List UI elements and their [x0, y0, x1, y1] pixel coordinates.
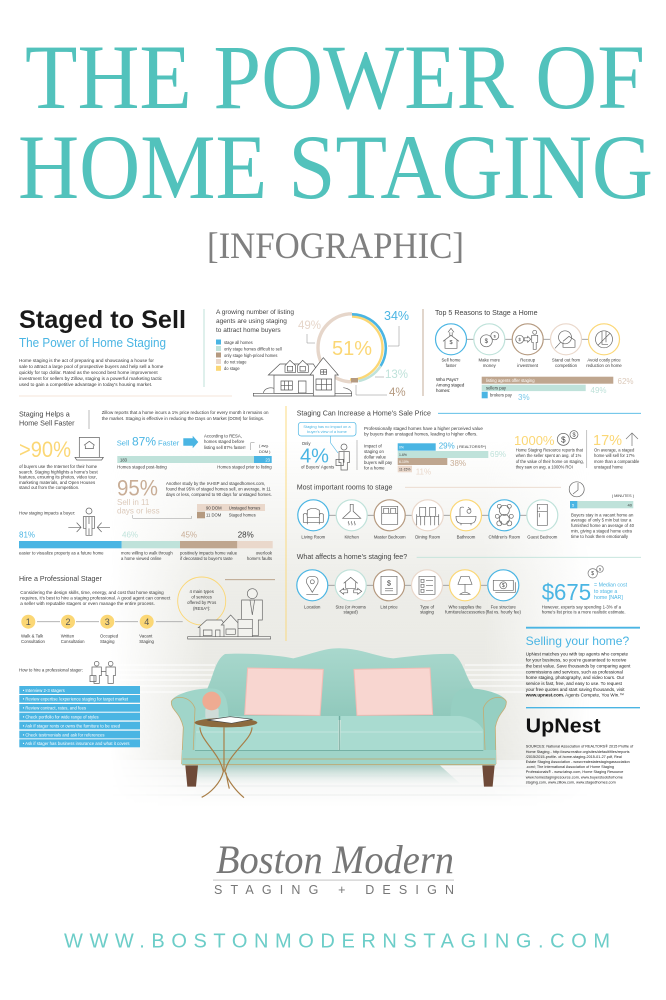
sources: www.homestagingresource.com, www.buyerstoolsforhome	[526, 775, 623, 779]
heading: staged to sell: Staged to Sell	[19, 306, 186, 334]
panel: time in home	[569, 482, 635, 539]
stat: 4 percent of agents	[300, 441, 334, 470]
stat: 1000 percent roi: $	[572, 432, 576, 438]
bar chart: dollar impact: 29%	[439, 442, 455, 451]
title	[18, 26, 653, 218]
reason 2: make more money: money	[483, 363, 497, 368]
panel: staging helps a home sell faster: ( avg.	[259, 443, 269, 448]
icon: house	[253, 358, 352, 396]
stat: 1000 percent roi: when the seller spent an avg. of 1%	[516, 453, 582, 458]
steps 1 to 4: 2	[65, 617, 71, 627]
factor: list price: $	[387, 580, 391, 588]
resa note: listing sell 87% faster!	[204, 445, 246, 450]
checklist for hiring: • Ask if stager has business insurance and what it covers	[23, 741, 130, 746]
who pays bars: brokers pay	[490, 392, 513, 398]
median cost label: = Median cost	[594, 582, 628, 588]
factor: location: Location	[304, 604, 321, 609]
buyer impact bar: more willing to walk through	[121, 550, 173, 555]
heading: selling your home: Selling your home?	[526, 634, 630, 648]
bar chart: dollar impact: 11%	[416, 468, 431, 477]
bar: days on market: Homes staged prior to listing	[217, 465, 272, 470]
icon: coins	[588, 566, 603, 578]
buyers paragraph: search. Staging highlights a home's best	[19, 469, 98, 474]
steps 1 to 4: 1	[26, 617, 31, 627]
stat: 1000 percent roi: $	[561, 436, 566, 444]
room: master bedroom	[374, 500, 406, 539]
zillow statement: the market. Staging is effective in reducing the Days on Market (DOM) for listings.	[102, 416, 264, 421]
who pays bars: Who Pays?	[436, 377, 459, 382]
stat: 4 percent of agents: Only	[302, 441, 311, 446]
sources: staging.com, www.zillow.com, www.stagedhomes.com	[526, 780, 616, 784]
service types callout: of services	[191, 594, 212, 600]
heading: agents are using staging	[216, 318, 287, 325]
bar: minutes	[570, 501, 633, 508]
who pays bars: Among staged	[436, 382, 465, 388]
buyer impact bar: positively impacts home value	[180, 550, 238, 555]
legend: only stage homes difficult to sell	[224, 346, 282, 351]
buyer impact bar: overlook	[256, 550, 273, 555]
buyer impact bar: 45%	[181, 531, 197, 540]
donut chart	[318, 314, 386, 382]
who pays bars	[436, 377, 634, 402]
factor: who supplies: furniture/accessories	[445, 610, 485, 615]
steps 1 to 4: Walk & Talk	[21, 633, 44, 638]
steps 1 to 4: 3	[105, 617, 110, 627]
room: children's room	[488, 500, 521, 539]
reason 2: make more money	[474, 324, 505, 368]
service types callout: offered by Pros	[187, 600, 216, 605]
subheading: The Power of Home Staging	[19, 336, 166, 350]
impact label: for a home	[364, 466, 385, 471]
reason 4: stand out: Stand out from	[552, 358, 581, 362]
reason 2: make more money: Make more	[479, 358, 501, 362]
promo paragraph: www.upnest.com.	[525, 693, 564, 698]
buyer impact bar: 46%	[122, 531, 138, 540]
sources: .com/; The International Association of Home Staging	[526, 765, 614, 769]
reason 4: stand out: competition	[555, 363, 578, 368]
bar: days on market	[117, 456, 272, 470]
buyers paragraph: stand out from the competition.	[19, 485, 79, 490]
room: bathroom: Bathroom	[457, 534, 476, 539]
heading: Most important rooms to stage	[297, 483, 393, 491]
factor: fee structure	[486, 570, 522, 615]
median cost label: to stage a	[594, 589, 617, 595]
panel: most important rooms	[297, 483, 561, 539]
arm piping	[171, 697, 506, 764]
steps 1 to 4	[21, 615, 154, 644]
checklist for hiring: • Ask if stager rents or owns the furniture to be used	[23, 723, 121, 728]
panel: top 5 reasons	[435, 309, 634, 402]
intro paragraph: sale to attract a large pool of prospective buyers and help sell a home	[19, 364, 164, 369]
stat: 675 dollars: $675	[542, 579, 591, 605]
paragraph: furnished home an average of 40	[571, 523, 635, 528]
heading: Home Sell Faster	[19, 418, 75, 428]
promo paragraph: for your business, so you're guaranteed to receive	[526, 658, 627, 662]
callout: no impact: Staging has no impact on a	[303, 424, 351, 429]
reason 1: sell home faster	[436, 324, 466, 368]
pillows	[245, 668, 323, 715]
legend	[216, 340, 282, 371]
steps 1 to 4: Written	[61, 633, 75, 638]
factor: type of staging: Type of	[420, 604, 435, 609]
perceived value text: by buyers than unstaged homes, leading to higher offers.	[364, 432, 478, 437]
reason 5: avoid price reduction: Avoid costly price	[587, 358, 621, 362]
how to hire label: How to hire a professional stager:	[19, 668, 83, 673]
bar: days on market: 23	[265, 457, 271, 462]
room: guest bedroom	[527, 500, 558, 539]
factor: fee structure: (flat vs. hourly fee)	[486, 610, 522, 615]
service types callout: 4 main types	[190, 589, 214, 594]
reason 2: make more money: $	[485, 339, 489, 345]
legend: do not stage	[224, 360, 247, 365]
estimate note: home's list price is a more realistic estimate.	[542, 610, 626, 615]
logo: upnest: UpNest	[526, 715, 601, 738]
heading: Top 5 Reasons to Stage a Home	[435, 309, 538, 317]
reason 5: avoid price reduction: reduction on home	[586, 363, 622, 368]
steps 1 to 4: Occupied	[100, 633, 119, 638]
buyer impact bar: a home viewed online	[121, 556, 162, 561]
service types callout: (RESA*):	[193, 606, 210, 611]
stat: 1000 percent roi: 1000%	[514, 433, 555, 448]
stat: 17 percent more: home will sell for 17%	[594, 453, 635, 458]
dom comparison table: 11 DOM	[206, 512, 222, 518]
buyer impact bar: 81%	[19, 531, 35, 540]
promo paragraph: service is fast, free, and easy to use. To request	[526, 681, 623, 686]
bar chart: dollar impact: 69%	[490, 450, 506, 459]
sofa legs	[185, 765, 495, 787]
logo: boston modern staging and design: Boston Modern	[216, 837, 454, 882]
stat: 4 percent of agents: 4%	[300, 446, 329, 468]
callout: no impact: buyer's view of a home	[307, 429, 347, 434]
sources: Professionals® - www.iahsp.com, Home Staging Resource	[526, 770, 623, 774]
factor: size: staged)	[344, 610, 358, 615]
service types callout	[178, 577, 226, 625]
buyer impact bar	[19, 531, 273, 561]
legend: only stage high-priced homes	[224, 353, 277, 358]
stat: sell 87 percent faster: Faster	[158, 439, 180, 448]
callout values: 34%	[384, 309, 409, 323]
panel: staging can increase sale price	[297, 410, 641, 477]
dom comparison table	[197, 504, 265, 518]
buyers paragraph: marketing materials, and Open Houses	[19, 480, 96, 485]
bar chart: dollar impact: 1-6%	[399, 453, 407, 457]
buyer impact bar: 28%	[238, 531, 254, 540]
stat: 17 percent more: unstaged home	[594, 464, 624, 469]
panel: staged to sell intro	[19, 306, 186, 387]
callout values: 13%	[385, 369, 408, 381]
paragraph: average of only 5 min but tour a	[571, 518, 632, 523]
iahsp study text: days or less, compared to 90 days for unstaged homes.	[166, 492, 272, 497]
bar chart: dollar impact: 6-10%	[399, 460, 409, 464]
reason 1: sell home faster: faster	[446, 363, 457, 368]
stat: 1000 percent roi	[514, 431, 584, 469]
reason 3: recoup investment	[512, 324, 543, 368]
room: kitchen	[336, 500, 367, 539]
who pays bars: 49%	[590, 386, 607, 395]
bar chart: dollar impact	[398, 442, 506, 477]
callout: no impact	[298, 422, 356, 453]
stat: 4 percent of agents: of Buyers' Agents	[301, 465, 334, 470]
dom comparison table: Unstaged homes	[229, 505, 260, 510]
promo paragraph: the best value. Save thousands by comparing agent	[526, 663, 631, 668]
bar: days on market: 183	[120, 457, 128, 462]
room: living room	[298, 500, 329, 539]
bar: minutes: 40	[628, 502, 633, 507]
steps 1 to 4: Consultation	[21, 639, 45, 644]
panel: time in home: ( MINUTES )	[612, 493, 635, 498]
how staging impacts label: How staging impacts a buyer:	[19, 510, 75, 515]
subtitle: infographic: [INFOGRAPHIC]	[207, 226, 464, 267]
checklist for hiring	[19, 686, 140, 747]
right arm	[451, 688, 507, 765]
room: guest bedroom: Guest Bedroom	[527, 534, 558, 539]
heading: Hire a Professional Stager	[19, 575, 102, 583]
factor: list price: List price	[380, 604, 398, 609]
panel: staging fee factors	[297, 553, 641, 615]
paragraph: min, giving a staged home extra	[571, 528, 633, 533]
sofa back	[207, 648, 475, 720]
floor shadow	[193, 765, 460, 783]
resa note: homes staged before	[204, 439, 245, 444]
panel: median cost 675: $	[591, 571, 594, 577]
who pays bars: listing agents offer staging	[486, 378, 535, 383]
who pays bars: 3%	[518, 393, 530, 402]
reason 2: make more money: $	[494, 333, 497, 338]
website url: WWW.BOSTONMODERNSTAGING.COM	[64, 931, 610, 953]
stat: 1000 percent roi: Home Staging Resource reports that	[516, 448, 584, 453]
bar chart: dollar impact: 11-15%	[399, 468, 410, 472]
reason 1: sell home faster: Sell home	[441, 358, 461, 362]
median cost label: home [NAR]	[594, 595, 623, 601]
flower vase	[205, 708, 219, 718]
estimate note: However, experts say spending 1-3% of a	[542, 604, 622, 609]
room photo backdrop: wall, wainscot, floor	[135, 491, 562, 796]
heading: Staging Helps a	[19, 410, 70, 419]
panel: median cost 675: $	[599, 568, 601, 572]
room: dining room: Dining Room	[415, 534, 441, 539]
checklist for hiring: • Check portfolio for wide range of styles	[23, 714, 99, 719]
legend: do stage	[224, 366, 240, 371]
stat: 95 percent: Sell in 11	[117, 498, 150, 507]
stat: 17 percent more	[593, 433, 640, 469]
callout values	[298, 309, 409, 399]
room: kitchen: Kitchen	[345, 534, 359, 539]
room: children's room: Children's Room	[488, 534, 521, 539]
factor: size	[335, 570, 366, 615]
paragraph: Buyers stay in a vacant home an	[571, 512, 634, 517]
buyer impact bar: easier to visualize property as a future home	[19, 550, 104, 555]
resa note: According to RESA,	[204, 434, 242, 438]
impact label: Impact of	[364, 444, 382, 449]
steps 1 to 4: 4	[144, 617, 149, 627]
room: bathroom	[450, 500, 482, 539]
factor: who supplies	[445, 570, 485, 615]
impact label: dollar value	[364, 455, 387, 460]
impact label: buyers will pay	[364, 460, 393, 465]
paragraph: requires, it's best to hire a staging professional. A good agent can connect	[20, 596, 171, 600]
stat: 95 percent	[117, 476, 160, 516]
buyers paragraph: of buyers use the Internet for their home	[19, 464, 98, 469]
paragraph: time to hook them emotionally	[571, 534, 629, 539]
bar chart: dollar impact: 38%	[450, 459, 466, 468]
reason 4: stand out	[550, 324, 582, 368]
buyers paragraph: features, ensuring its photos, video tour,	[19, 474, 97, 480]
intro paragraph: used to gain a competitive advantage in today's housing market.	[19, 382, 152, 387]
sources: Home Staging - http://www.realtor.org/sites/default/files/reports	[526, 750, 630, 754]
stat: 17 percent more: 17%	[593, 433, 622, 449]
icon: laptop	[75, 437, 103, 460]
heading: What affects a home's staging fee?	[297, 553, 407, 561]
panel: staging helps a home sell faster	[19, 410, 273, 561]
factor: type of staging	[412, 570, 442, 615]
icon: agent with briefcase	[336, 444, 349, 470]
panel: median cost 675	[542, 566, 628, 615]
icon: buyer with arrows	[68, 508, 110, 535]
promo paragraph: UpNest matches you with top agents who compete	[526, 652, 629, 657]
reason 3: recoup investment: Recoup	[520, 358, 536, 362]
callout values: 49%	[298, 320, 321, 332]
intro paragraph: investment for sellers by Zillow, staging is a powerful marketing tactic	[19, 376, 163, 381]
panel: upnest promotion	[525, 628, 640, 784]
legend: stage all homes	[224, 340, 253, 345]
heading: A growing number of listing	[216, 309, 294, 316]
seat cushions	[195, 716, 339, 750]
dom comparison table: Staged homes	[229, 512, 256, 518]
checklist for hiring: • Interview 2-3 stagers	[23, 688, 65, 693]
who pays bars: 62%	[618, 377, 634, 386]
factor: location	[297, 570, 328, 609]
reason 1: sell home faster: $	[449, 340, 453, 346]
icon: stager with houses	[188, 589, 271, 639]
buyer impact bar: home's faults	[247, 556, 272, 561]
icon: clock	[569, 482, 584, 497]
reason 3: recoup investment: $	[519, 337, 522, 342]
paragraph: a seller with reputable stagers or even manage the entire process.	[20, 601, 155, 606]
factor: fee structure: $	[502, 583, 505, 589]
steps 1 to 4: Consultation	[61, 639, 85, 644]
promo paragraph: Agents Compete, You Win.™	[564, 693, 624, 698]
impact label: staging on	[364, 449, 384, 454]
icon: two people	[90, 661, 115, 683]
stat: sell 87 percent faster	[117, 435, 198, 449]
stat: 95 percent: days or less	[117, 506, 160, 516]
donut value: 51%	[332, 338, 372, 360]
factor: type of staging: staging	[420, 610, 435, 615]
promo paragraph: your free quotes and start saving thousands, visit	[526, 687, 625, 692]
room: master bedroom: Master Bedroom	[374, 534, 406, 539]
panel: listing agents donut	[216, 309, 409, 399]
steps 1 to 4: Staging	[139, 639, 154, 644]
stat: 1000 percent roi: of the value of their home on staging,	[516, 459, 584, 464]
bar chart: dollar impact: 0%	[399, 446, 404, 450]
bar chart: dollar impact: ( REALTORS®*)	[457, 444, 487, 449]
sources: SOURCES: National Association of REALTORS® 2015 Profile of	[526, 745, 634, 749]
stat: 17 percent more: more than a comparable	[594, 459, 640, 464]
intro paragraph: quickly for top dollar. Rated as the second best home improvement	[19, 370, 158, 375]
logo: boston modern staging and design: STAGING + DESIGN	[214, 883, 454, 897]
promo paragraph: commissions and services, such as professional	[526, 669, 623, 674]
room: dining room	[412, 500, 443, 539]
stat: 95 percent: 95%	[117, 476, 158, 501]
factor: fee structure: Fee structure	[491, 604, 517, 609]
stat: 17 percent more: On average, a staged	[594, 448, 635, 453]
iahsp study text: found that 95% of staged homes sell, on average, in 11	[166, 487, 271, 492]
left arm	[171, 688, 228, 765]
sofa photo illustration	[171, 648, 507, 798]
panel: staging helps a home sell faster: DOM )	[259, 449, 271, 454]
sources: Estate Staging Association - www.realestatestagingassociation	[526, 760, 630, 764]
factor: who supplies: Who supplies the	[449, 604, 482, 609]
factor: size: Size (or #rooms	[336, 604, 366, 609]
dom comparison table: 90 DOM	[206, 505, 222, 510]
reason 3: recoup investment: investment	[517, 363, 539, 368]
stat: sell 87 percent faster: Sell	[117, 439, 130, 448]
intro paragraph: Home staging is the act of preparing and showcasing a house for	[19, 358, 154, 363]
bar: days on market: Homes staged post-listing	[117, 465, 167, 470]
promo paragraph: home staging, photography, and video tours. Our	[526, 675, 625, 680]
sources: /2015/2015-profile- of-home-staging-2015-01-27.pdf, Real	[526, 755, 622, 759]
steps 1 to 4: Staging	[100, 639, 115, 644]
who pays bars: sellers pay	[486, 386, 507, 391]
iahsp study text: Another study by the IAHSP and stagedhomes.com,	[166, 481, 265, 486]
buyer impact bar: if decorated to buyer's taste	[180, 556, 233, 561]
heading: to attract home buyers	[216, 327, 281, 334]
checklist for hiring: • Check testimonials and ask for references	[23, 732, 105, 737]
perceived value text: Professionally staged homes have a higher perceived value	[364, 426, 483, 431]
heading: Staging Can Increase a Home's Sale Price	[297, 410, 431, 418]
checklist for hiring: • Review expertise /experience staging for target market	[23, 697, 129, 702]
checklist for hiring: • Review contract, rates, and fees	[23, 706, 86, 711]
panel: hire a professional stager	[19, 575, 275, 747]
who pays bars: homes:	[436, 388, 450, 393]
bar: minutes: 5	[572, 502, 575, 507]
side table	[200, 727, 252, 798]
room: living room: Living Room	[301, 534, 326, 539]
stat: 1000 percent roi: they saw on avg. a 1000% ROI	[516, 464, 573, 469]
zillow statement: Zillow reports that a home incurs a 1% price reduction for every month it remains on	[102, 410, 269, 415]
stat: sell 87 percent faster: 87%	[132, 435, 156, 449]
callout values: 4%	[389, 387, 406, 399]
steps 1 to 4: Vacant	[139, 633, 153, 638]
sofa base	[182, 750, 496, 765]
factor: list price	[374, 570, 404, 609]
stat: over 90 percent: >90%	[19, 437, 71, 462]
paragraph: Considering the design skills, time, energy, and cost that home staging	[20, 590, 164, 595]
reason 5: avoid price reduction	[586, 324, 622, 368]
